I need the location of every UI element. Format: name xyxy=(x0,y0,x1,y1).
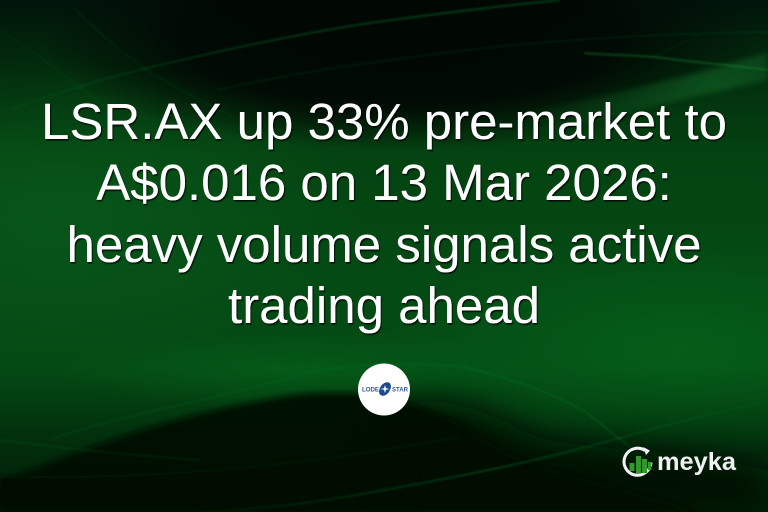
company logo: Lode Star badge: STAR xyxy=(392,388,409,394)
company logo: Lode Star badge xyxy=(358,364,410,416)
title: LSR.AX up 33% pre-market to xyxy=(41,93,727,150)
company logo: Lode Star badge: LODE xyxy=(362,388,379,394)
title: heavy volume signals active xyxy=(66,216,702,273)
title: trading ahead xyxy=(228,277,540,334)
wordmark: meyka xyxy=(657,448,737,476)
background: dark upper swoosh xyxy=(0,0,768,170)
background: right band xyxy=(500,52,768,135)
title: A$0.016 on 13 Mar 2026: xyxy=(96,154,672,211)
icon: meyka ring with bars xyxy=(624,447,652,475)
title xyxy=(41,93,727,334)
background: dark lower swoosh xyxy=(0,393,768,512)
brand logo: meyka xyxy=(624,447,737,476)
